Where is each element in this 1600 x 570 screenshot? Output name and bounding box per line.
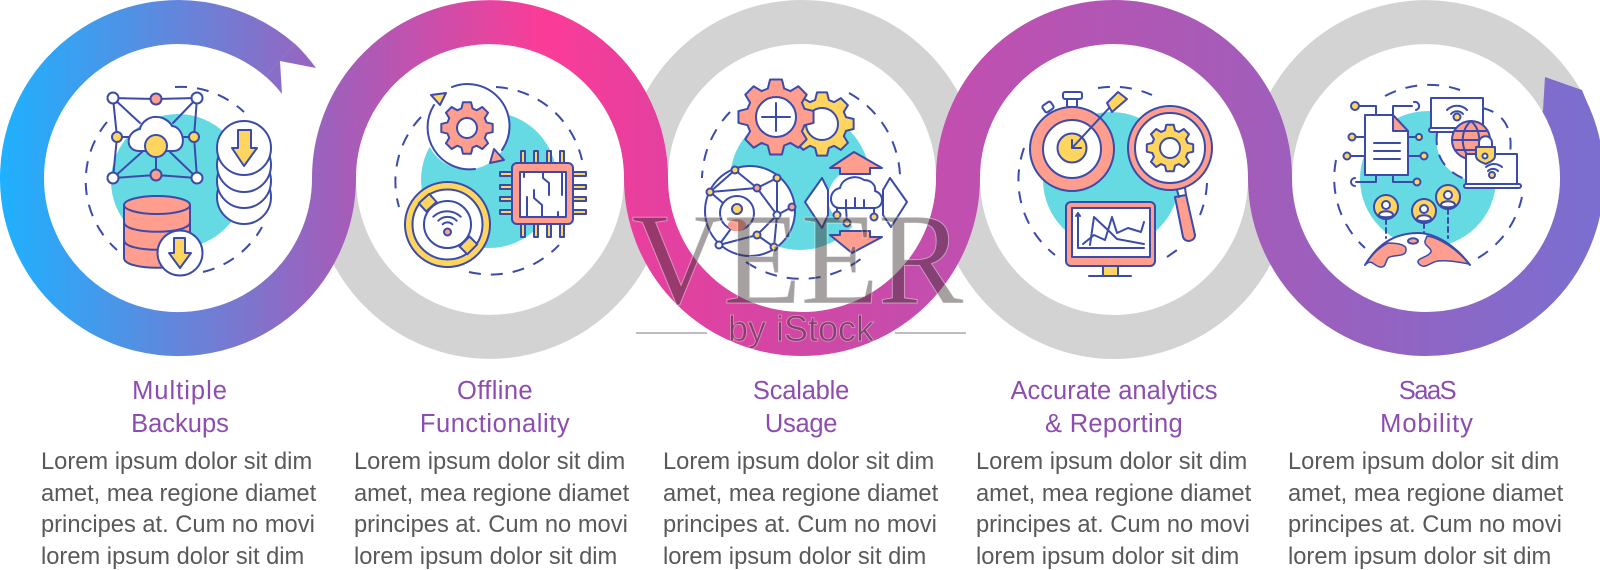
gradient ribbon with arrow ends (22, 22, 1590, 334)
step 4 text: Lorem ipsum dolor sit dim (976, 449, 1247, 475)
step 2 title (420, 377, 570, 438)
step 2 text (354, 449, 630, 570)
step 3 title: Usage (765, 410, 837, 438)
step 3 title: Scalable (753, 377, 849, 405)
step 3 text: lorem ipsum dolor sit dim (663, 544, 926, 570)
step 1 text: principes at. Cum no movi (41, 512, 315, 538)
step 2 text: Lorem ipsum dolor sit dim (354, 449, 625, 475)
step 1 title (131, 377, 229, 438)
step 4 title: & Reporting (1045, 410, 1183, 438)
icon: monitor with chart (1066, 202, 1155, 276)
grey ribbon track (334, 22, 1561, 337)
icon: accurate analytics (1018, 87, 1212, 276)
icon: database with arrow (124, 196, 202, 276)
icon: coin stack with arrow (217, 121, 271, 224)
step 5 text (1288, 449, 1564, 570)
step 5 title: SaaS (1399, 377, 1455, 405)
step 4 text: principes at. Cum no movi (976, 512, 1250, 538)
icon: scalable usage (702, 79, 907, 279)
icon: cloud network (108, 92, 202, 184)
icon: document with connectors (1344, 102, 1428, 186)
icon: cloud with four arrows (805, 152, 907, 253)
step 4 text (976, 449, 1252, 570)
step 5 text: lorem ipsum dolor sit dim (1288, 544, 1551, 570)
watermark: VEER by iStock: VEER (632, 187, 964, 332)
step 3 text: Lorem ipsum dolor sit dim (663, 449, 934, 475)
icon: wifi maze (405, 182, 490, 267)
step 1 title: Multiple (132, 377, 228, 405)
step 2 text: principes at. Cum no movi (354, 512, 628, 538)
icon: magnifier with gear (1128, 106, 1212, 241)
step 4 text: lorem ipsum dolor sit dim (976, 544, 1239, 570)
icon: laptops with globe and lock (1429, 98, 1521, 188)
icon: processor chip (500, 151, 586, 237)
icon: saas mobility (1334, 85, 1522, 267)
icon: double gears with plus (738, 79, 854, 156)
step 1 title: Backups (131, 410, 229, 438)
step 4 title (1010, 377, 1217, 438)
step 3 text: principes at. Cum no movi (663, 512, 937, 538)
step 1 text: Lorem ipsum dolor sit dim (41, 449, 312, 475)
step 4 title: Accurate analytics (1011, 377, 1217, 405)
step 1 text: amet, mea regione diamet (41, 481, 316, 507)
step 2 title: Offline (457, 377, 533, 405)
icon: offline functionality (395, 84, 586, 275)
icon: rotating gear (425, 84, 510, 170)
icon: people network globe (705, 166, 796, 256)
watermark: VEER by iStock: by iStock (728, 308, 875, 349)
icon: stopwatch target with dart (1030, 92, 1127, 191)
step 5 title (1380, 377, 1474, 438)
icon: multiple backups (86, 87, 271, 276)
step 5 text: principes at. Cum no movi (1288, 512, 1562, 538)
step 3 text: amet, mea regione diamet (663, 481, 938, 507)
step 5 title: Mobility (1380, 410, 1474, 438)
step 3 title (753, 377, 849, 438)
step 2 title: Functionality (420, 410, 570, 438)
step 1 text (41, 449, 316, 570)
step 3 text (663, 449, 938, 570)
step 4 text: amet, mea regione diamet (976, 481, 1251, 507)
step 5 text: amet, mea regione diamet (1288, 481, 1563, 507)
step 2 text: amet, mea regione diamet (354, 481, 629, 507)
icon: users over earth (1365, 185, 1470, 267)
step 2 text: lorem ipsum dolor sit dim (354, 544, 617, 570)
step 5 text: Lorem ipsum dolor sit dim (1288, 449, 1559, 475)
step 1 text: lorem ipsum dolor sit dim (41, 544, 304, 570)
